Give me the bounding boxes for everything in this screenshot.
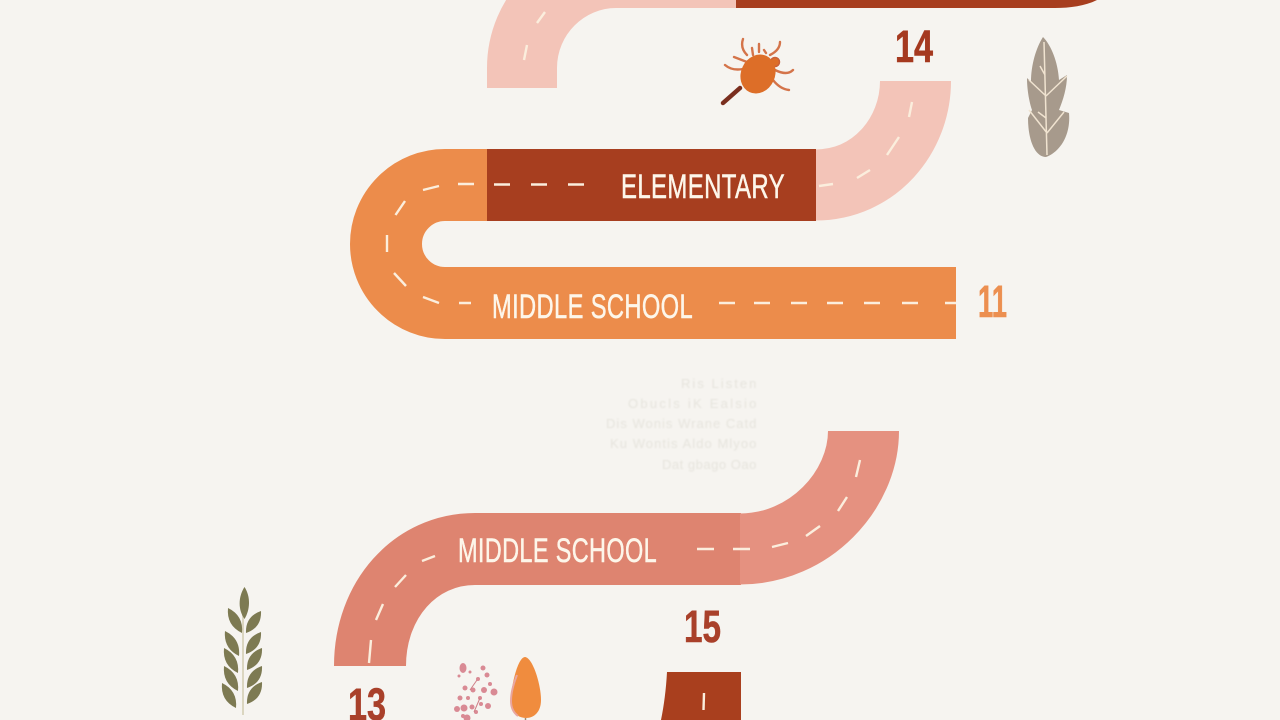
faint text block: Ku Wontis Aldo Mlyoo [610,436,757,451]
road segment: top pink curve with dark band [522,0,1097,88]
icon: pink flower cluster [454,663,498,720]
road segment: orange hairpin [386,184,956,303]
number 15: 15 [684,601,721,652]
faint text block: Dis Wonis Wrane Catd [606,416,757,431]
road segment: salmon S curve [369,431,864,666]
icon: orange bug with handle [723,39,793,103]
number 11: 11 [978,276,1007,327]
label: middle school upper: MIDDLE SCHOOL [492,288,693,326]
road segment: upper right pink curve [815,81,916,186]
road segment: bottom dark stub [661,672,741,720]
faint text block: Ris Listen [681,376,757,391]
faint text block: Obucls iK Ealsio [628,396,757,411]
faint text block [606,376,757,472]
road segment: elementary dark band [487,149,816,221]
icon: orange teardrop tree [511,657,541,720]
icon: olive plant [222,587,262,715]
label: middle school lower: MIDDLE SCHOOL [458,532,657,570]
label: elementary: ELEMENTARY [621,168,785,206]
faint text block: Dat gbago Oao [662,457,757,472]
number 14: 14 [895,21,933,72]
icon: grey leaf [1027,37,1069,157]
